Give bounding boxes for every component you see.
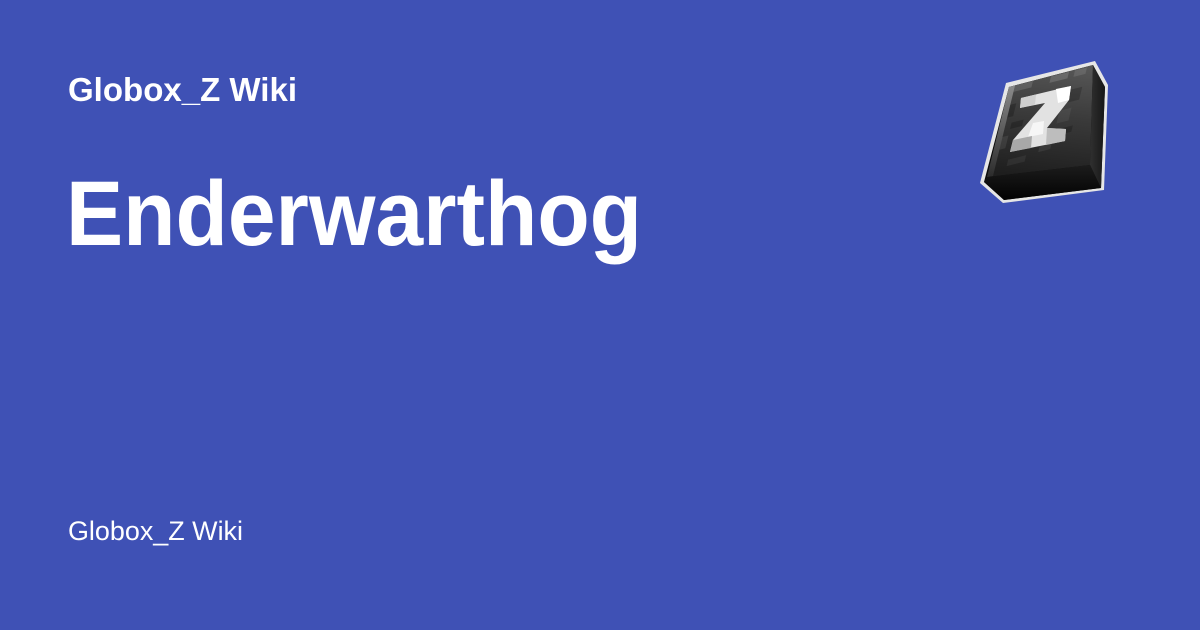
footer site name: Globox_Z Wiki [68, 516, 243, 546]
site name heading: Globox_Z Wiki [68, 71, 297, 108]
page title: Enderwarthog [66, 163, 642, 265]
icon: Z block logo [980, 61, 1108, 203]
